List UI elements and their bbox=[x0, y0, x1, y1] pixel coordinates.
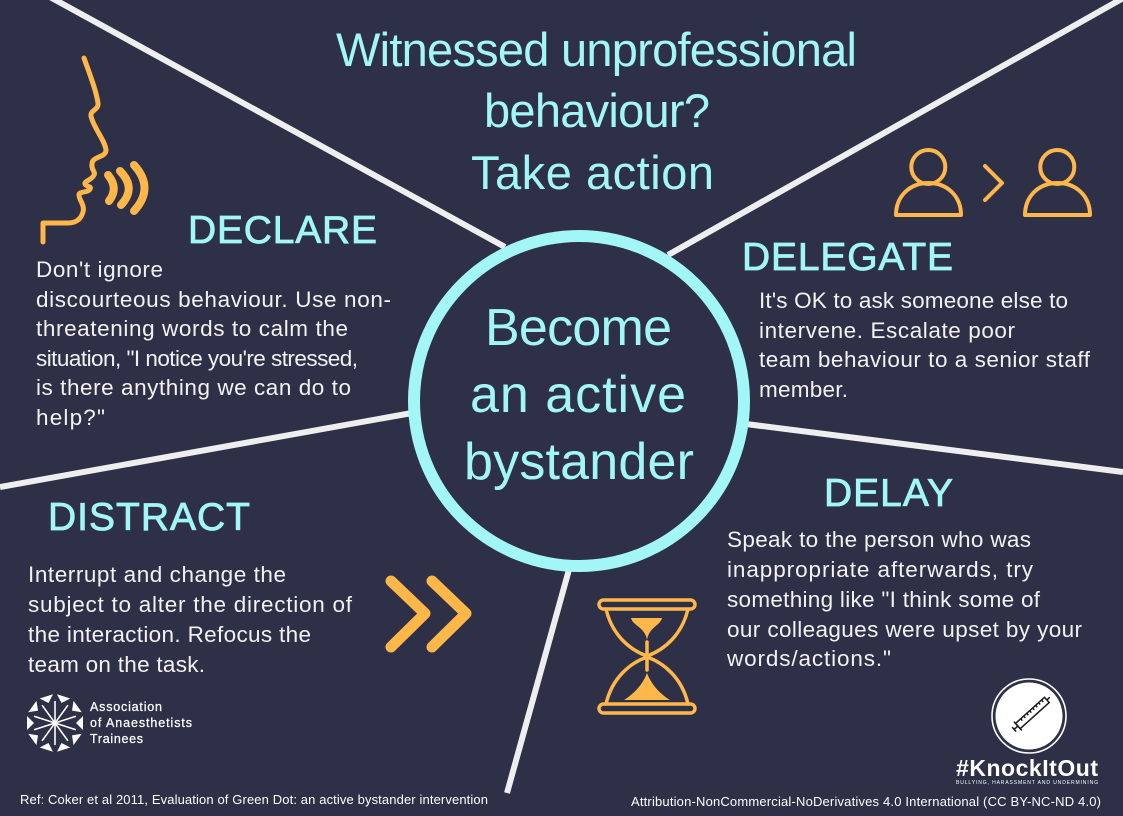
logo: knockitout bbox=[956, 679, 1098, 786]
logo: knockitout: BULLYING, HARASSMENT AND UNDERMINING bbox=[956, 780, 1098, 786]
text: distract body: Interrupt and change the bbox=[28, 562, 286, 587]
title bbox=[336, 23, 857, 199]
logo: association of anaesthetists trainees: Association bbox=[90, 700, 162, 714]
logo: knockitout: #KnockItOut bbox=[956, 755, 1098, 781]
text: declare body: help?" bbox=[36, 405, 105, 430]
text: distract body bbox=[28, 562, 353, 677]
text: delay body: inappropriate afterwards, try bbox=[727, 557, 1034, 582]
title: behaviour? bbox=[484, 84, 710, 137]
heading: declare: DECLARE bbox=[188, 209, 377, 252]
central circle: become an active bystander: Become bbox=[485, 299, 672, 357]
text: delegate body: It's OK to ask someone else to bbox=[759, 288, 1068, 313]
icon: double chevron bbox=[391, 581, 466, 647]
title: Take action bbox=[471, 146, 714, 199]
text: delegate body: member. bbox=[759, 377, 848, 402]
text: delay body: something like "I think some of bbox=[727, 587, 1041, 612]
text: declare body: discourteous behaviour. Use non- bbox=[36, 287, 391, 312]
text: distract body: subject to alter the direction of bbox=[28, 592, 353, 617]
title: Witnessed unprofessional bbox=[336, 23, 857, 76]
text: delay body: our colleagues were upset by your bbox=[727, 617, 1082, 642]
icon: person to person bbox=[896, 150, 1090, 215]
central circle: become an active bystander: an active bbox=[470, 366, 686, 424]
panel: delegate bbox=[742, 150, 1091, 402]
licence note: Attribution-NonCommercial-NoDerivatives 4.0 International (CC BY-NC-ND 4.0) bbox=[631, 794, 1101, 809]
text: delegate body: intervene. Escalate poor bbox=[759, 318, 1016, 343]
text: delay body bbox=[726, 527, 1082, 671]
text: declare body: is there anything we can do to bbox=[36, 375, 351, 400]
text: delegate body: team behaviour to a senior staff bbox=[759, 347, 1091, 372]
central circle: become an active bystander bbox=[414, 236, 744, 566]
text: declare body: threatening words to calm the bbox=[36, 316, 348, 341]
heading: delay: DELAY bbox=[824, 472, 953, 515]
heading: distract: DISTRACT bbox=[48, 496, 250, 539]
icon: speaking face bbox=[43, 58, 144, 242]
text: distract body: the interaction. Refocus the bbox=[28, 622, 311, 647]
text: declare body: Don't ignore bbox=[36, 257, 163, 282]
panel: declare bbox=[36, 58, 391, 430]
logo: association of anaesthetists trainees bbox=[27, 694, 192, 752]
logo: association of anaesthetists trainees: of Anaesthetists bbox=[90, 716, 192, 730]
text: declare body bbox=[36, 257, 391, 430]
central circle: become an active bystander: bystander bbox=[464, 433, 694, 491]
heading: delegate: DELEGATE bbox=[742, 236, 953, 279]
text: delegate body bbox=[759, 288, 1091, 402]
logo: association of anaesthetists trainees: Trainees bbox=[90, 732, 143, 746]
panel: delay bbox=[599, 472, 1082, 713]
icon: hourglass bbox=[599, 600, 695, 713]
text: declare body: situation, "I notice you're stressed, bbox=[36, 346, 358, 371]
panel: distract bbox=[28, 496, 466, 677]
text: delay body: Speak to the person who was bbox=[727, 527, 1031, 552]
reference note: Ref: Coker et al 2011, Evaluation of Green Dot: an active bystander intervention bbox=[20, 792, 488, 807]
text: delay body: words/actions." bbox=[726, 646, 891, 671]
text: distract body: team on the task. bbox=[28, 652, 205, 677]
